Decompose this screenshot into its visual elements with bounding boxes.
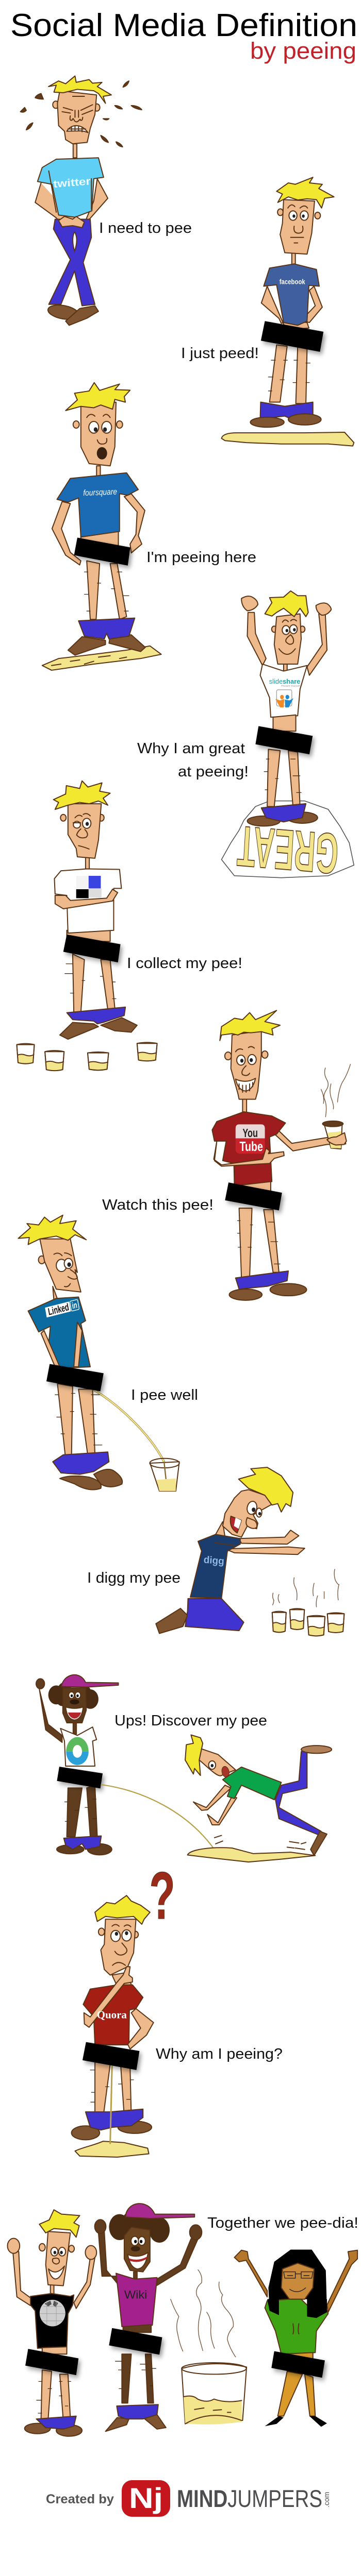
figure: twitter man needing to pee: twitter (53, 176, 91, 191)
logo: mindjumpers: .com (322, 2492, 331, 2507)
censor bar (25, 2349, 78, 2375)
figure: delicious man collecting cups (17, 781, 157, 1071)
figure: falling man slipping on puddle (185, 1735, 332, 1862)
logo: mindjumpers (122, 2480, 331, 2517)
caption: I pee well: I pee well (131, 1387, 198, 1403)
censor bar (271, 2351, 325, 2378)
figure: youtube man with cup (212, 1010, 350, 1300)
figure: quora man thinking (72, 1858, 175, 2157)
censor bar (63, 935, 121, 962)
logo: mindjumpers: Nj (129, 2482, 163, 2514)
icon: steaming cups (272, 1569, 344, 1636)
icon: youtube logo: You (242, 1127, 258, 1140)
logo: digg: digg (203, 1554, 224, 1567)
icon: slideshare logo (275, 690, 293, 707)
figure: wiki man: Wiki (124, 2289, 147, 2301)
caption: Watch this pee!: Watch this pee! (102, 1197, 214, 1213)
censor bar (57, 1767, 103, 1788)
icon: cups of pee (17, 1042, 157, 1071)
figure: slideshare man on GREAT rock: slideshare (269, 677, 301, 685)
icon: delicious logo (76, 876, 102, 898)
figure: woman in green (235, 2249, 357, 2427)
credit: created by: Created by (46, 2492, 114, 2506)
caption: Why I am great at peeing!: Why I am great (137, 740, 245, 757)
figure: wikipedia man (8, 2210, 96, 2436)
icon: wikipedia globe (40, 2300, 65, 2326)
figure: facebook man (222, 177, 354, 446)
caption: Together we pee-dia!: Together we pee-dia! (207, 2215, 358, 2231)
caption: I'm peeing here: I'm peeing here (146, 549, 256, 566)
subtitle: by peeing (250, 38, 356, 64)
figure: facebook man: facebook (280, 278, 305, 286)
icon: cup in hand (322, 1121, 347, 1149)
caption: Why I am great at peeing!: at peeing! (178, 764, 249, 780)
cup under stream (150, 1459, 179, 1491)
figure: linkedin man peeing into cup (18, 1215, 179, 1491)
logo: linkedin: Linked (47, 1301, 70, 1317)
figure: foursquare man (42, 383, 161, 670)
icon: stumbleupon logo (66, 1737, 89, 1765)
caption: Why I am great at peeing! (137, 740, 249, 780)
figure: quora man thinking: Quora (97, 2009, 127, 2021)
urine stream (101, 1785, 214, 1848)
caption: Why am I peeing?: Why am I peeing? (156, 2046, 283, 2062)
censor bar (83, 2042, 139, 2070)
figure: slideshare man on GREAT rock: Present Yourself (281, 685, 300, 687)
figure: digg man kneeling before cups (156, 1467, 344, 1636)
censor bar (74, 537, 130, 566)
title: Social Media Definition (10, 8, 357, 43)
caption: I just peed!: I just peed! (181, 345, 259, 362)
figure: slideshare man on GREAT rock (222, 591, 354, 886)
logo: linkedin: in (71, 1300, 78, 1311)
urine stream (93, 1389, 166, 1479)
censor bar (225, 1182, 282, 1210)
rock with inscription (222, 801, 354, 886)
censor bar (255, 726, 313, 754)
caption: I need to pee: I need to pee (99, 220, 192, 236)
censor bar (109, 2328, 162, 2354)
censor bar (261, 321, 323, 352)
caption: I digg my pee: I digg my pee (87, 1570, 180, 1586)
icon: question mark: ? (150, 1858, 175, 1933)
urine stream (110, 2066, 112, 2144)
censor bar (46, 1364, 104, 1392)
figure: foursquare man: foursquare (83, 487, 117, 498)
rock with inscription: GREAT (236, 814, 340, 886)
figure: wiki man (95, 2204, 202, 2431)
caption: Ups! Discover my pee: Ups! Discover my pee (114, 1713, 267, 1729)
logo: mindjumpers: MINDJUMPERS (177, 2485, 322, 2512)
caption: I collect my pee!: I collect my pee! (127, 955, 242, 972)
icon: youtube logo (236, 1124, 265, 1154)
figure: twitter man needing to pee (21, 76, 142, 325)
icon: youtube logo: Tube (239, 1139, 263, 1154)
steam (321, 1064, 350, 1117)
icon: big steaming cup of pee (171, 2270, 247, 2425)
figure: stumbleupon man (36, 1675, 214, 1855)
